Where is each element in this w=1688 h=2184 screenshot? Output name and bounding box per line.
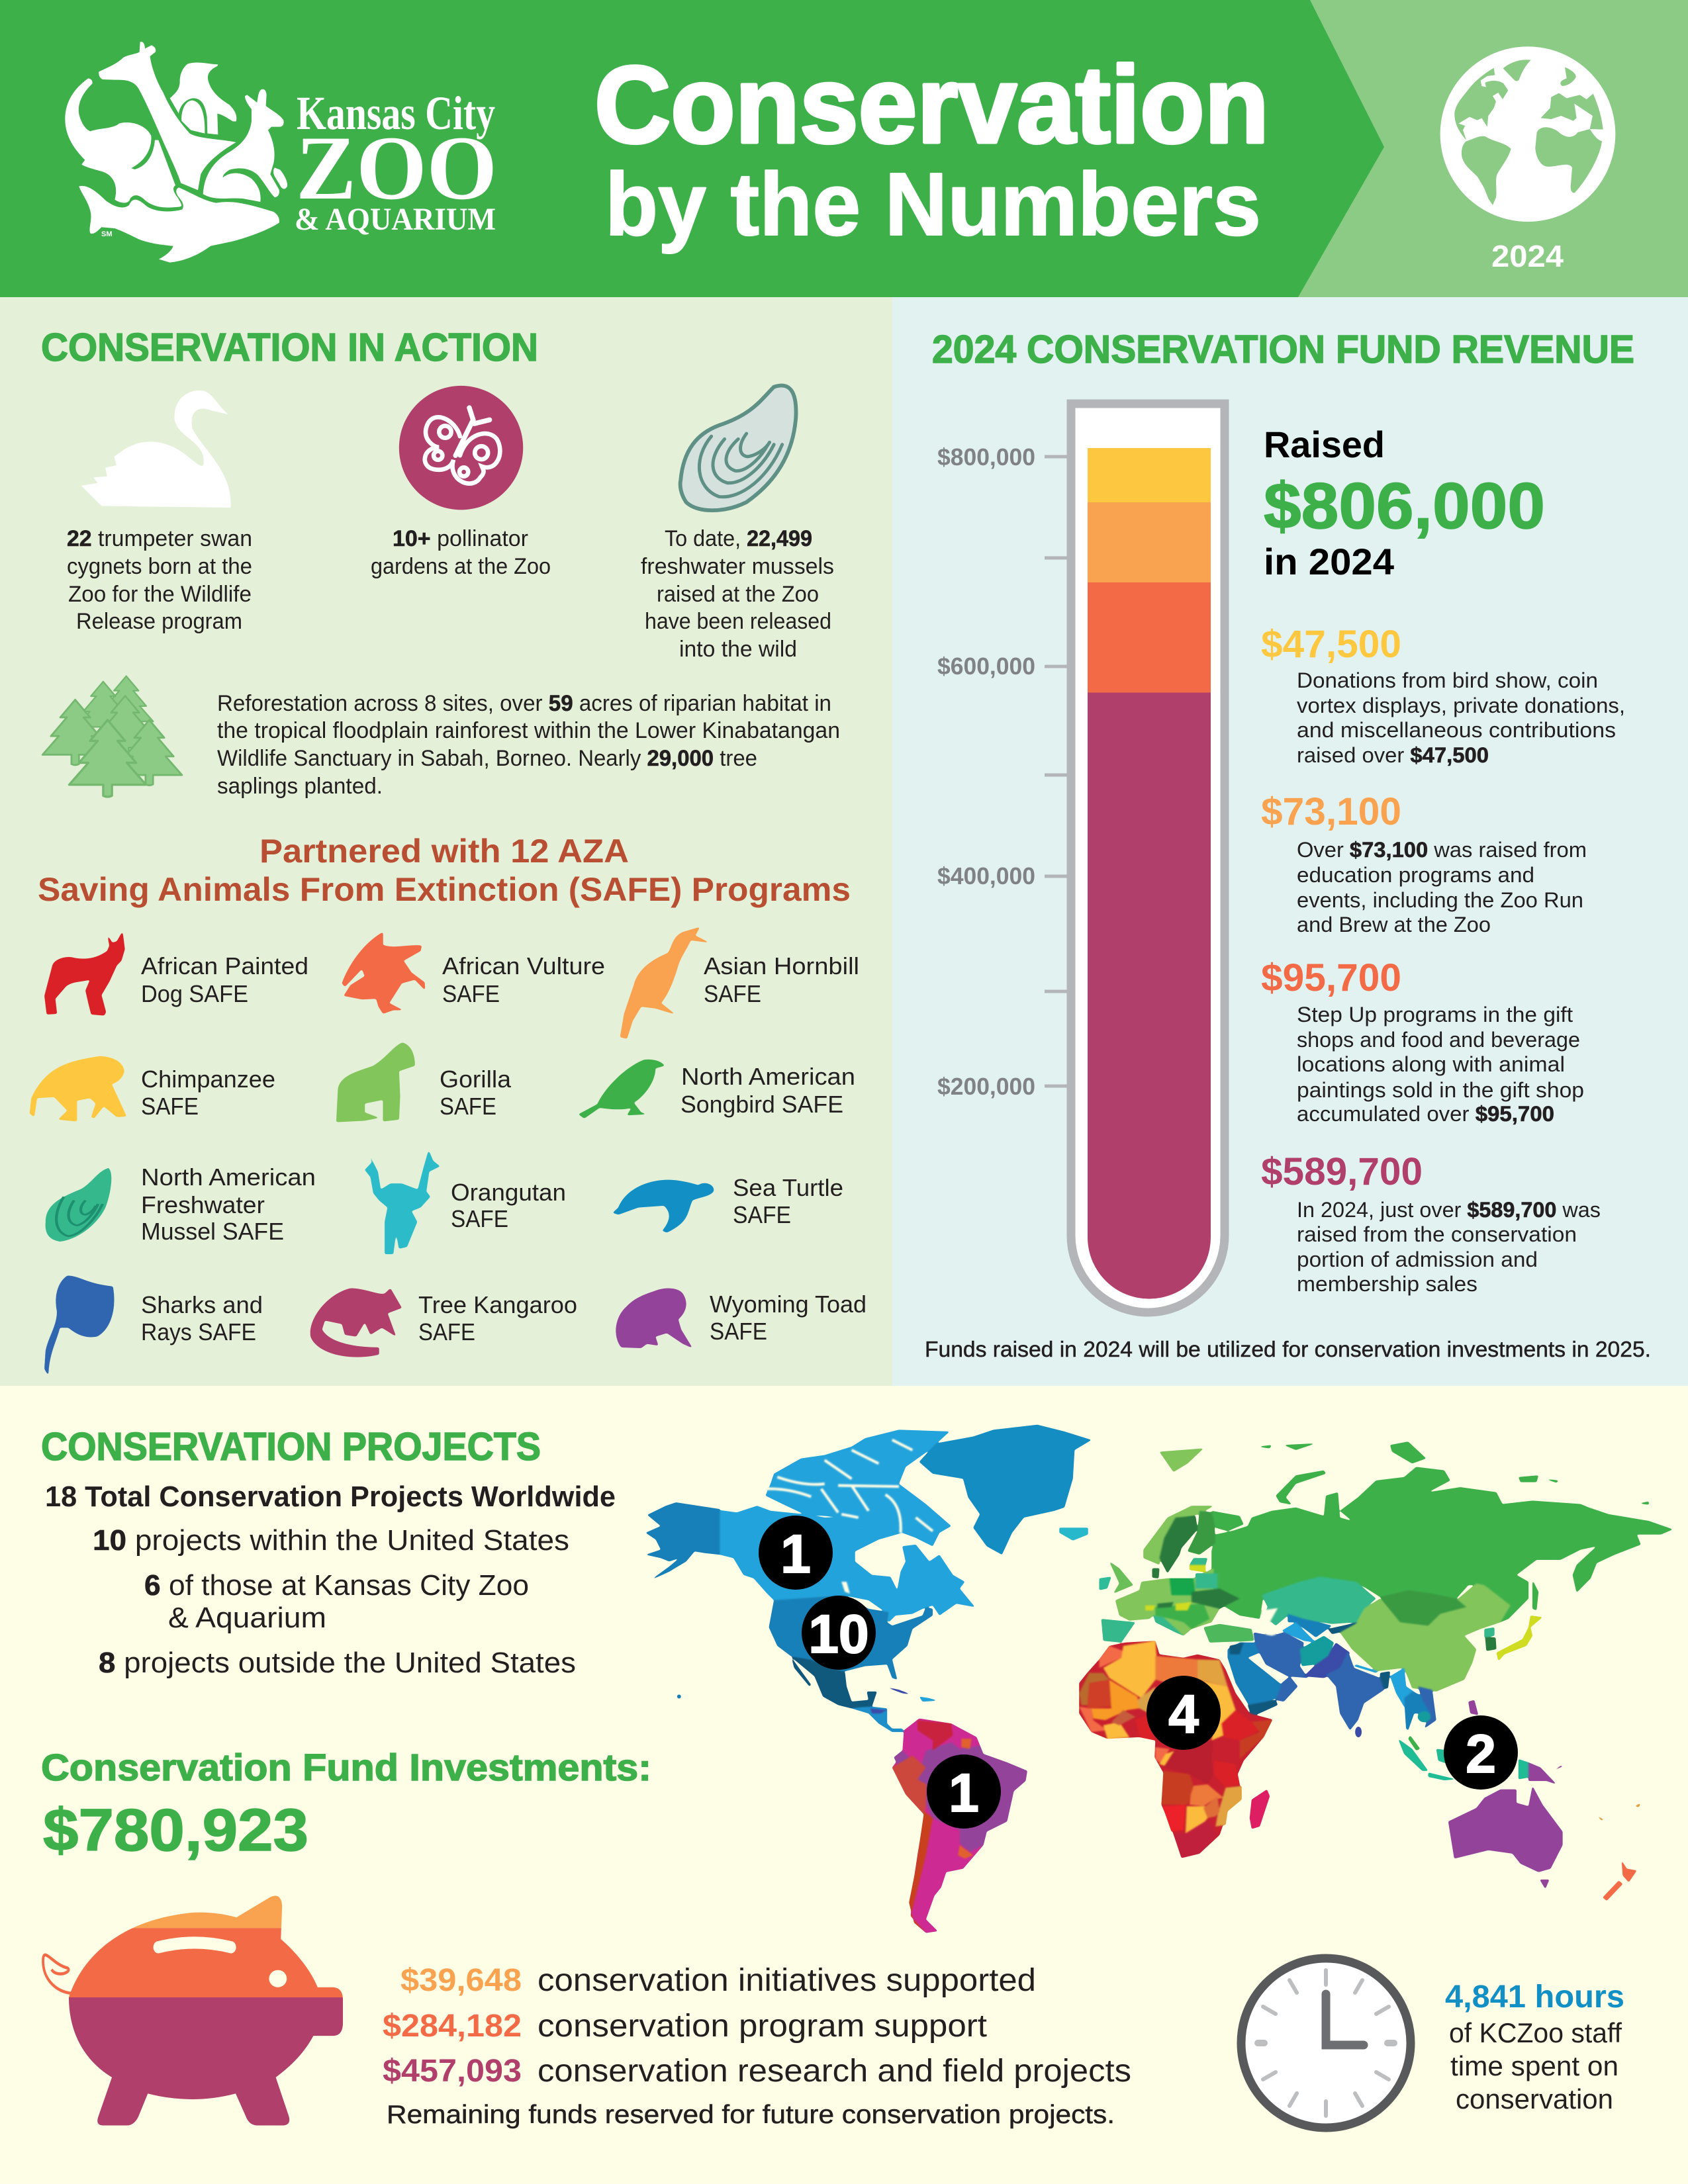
project counts: 8 projects outside the United States — [99, 1647, 576, 1679]
icon: globe — [1440, 46, 1615, 222]
project counts: 6 of those at Kansas City Zoo — [144, 1569, 529, 1602]
item: 95,700: paintings sold in the gift shop — [1297, 1078, 1584, 1102]
heading: fund investments — [41, 1747, 651, 1864]
icon: clock — [1241, 1958, 1411, 2128]
item: 47,500 — [1261, 623, 1625, 767]
label: Tree Kangaroo — [418, 1291, 577, 1345]
marker: South America 1 — [927, 1754, 1001, 1829]
label: Asian Hornbill — [704, 952, 859, 1007]
investment breakdown: Remaining funds reserved for future conservation projects. — [387, 2101, 1115, 2129]
item: 589,700: $589,700 — [1261, 1150, 1423, 1193]
icon: vulture — [342, 932, 425, 1014]
text: swan cygnets: 22 trumpeter swan — [67, 526, 252, 551]
item: 47,500: vortex displays, private donations, — [1297, 694, 1625, 717]
text: reforestation: the tropical floodplain rainforest within the Lower Kinabatangan — [217, 718, 840, 743]
text: pollinator gardens: 10+ pollinator — [393, 526, 528, 551]
label: African Painted Dog: African Painted — [141, 952, 308, 979]
heading: SAFE programs: Saving Animals From Extinction (SAFE) Programs — [38, 871, 851, 908]
panel: conservation in action — [0, 297, 892, 1386]
header banner — [0, 0, 1688, 297]
marker: United States 10: 10 — [808, 1604, 869, 1664]
label: Gorilla: Gorilla — [440, 1066, 512, 1093]
label: Sharks and Rays: Sharks and — [141, 1291, 263, 1318]
heading: fund investments: Conservation Fund Investments: — [41, 1747, 651, 1789]
label: African Painted Dog: Dog SAFE — [141, 980, 248, 1007]
label: North American Freshwater Mussel: Mussel SAFE — [141, 1218, 284, 1245]
axis ticks and labels: $800,000 — [937, 443, 1035, 471]
icon: mussel — [680, 385, 796, 510]
icon: pine trees — [42, 676, 182, 797]
investment breakdown: conservation program support — [538, 2009, 987, 2044]
title: Conservation — [594, 44, 1269, 165]
label: Sea Turtle: Sea Turtle — [733, 1174, 843, 1201]
icon: chimpanzee — [30, 1056, 126, 1121]
item: 95,700: accumulated over $95,700 — [1297, 1102, 1554, 1126]
text: swan cygnets: Release program — [76, 609, 242, 634]
logo wordmark: ZOO — [296, 117, 497, 218]
panel: conservation projects — [41, 1425, 1673, 2129]
project counts: 10 projects within the United States — [93, 1524, 569, 1557]
label: Orangutan: SAFE — [451, 1205, 508, 1232]
label: Gorilla: SAFE — [440, 1093, 496, 1120]
label: North American Songbird: Songbird SAFE — [680, 1091, 843, 1118]
label: Sea Turtle — [733, 1174, 843, 1228]
icon: butterfly in circle — [399, 386, 523, 510]
staff time callout: conservation — [1456, 2083, 1613, 2115]
logo wordmark — [295, 87, 497, 237]
axis ticks and labels: $600,000 — [937, 653, 1035, 680]
label: Tree Kangaroo: Tree Kangaroo — [418, 1291, 577, 1318]
icon: ray — [44, 1276, 114, 1376]
item: 47,500: and miscellaneous contributions — [1297, 718, 1616, 742]
investment breakdown: $39,648 — [400, 1963, 522, 1998]
label: Sharks and Rays — [141, 1291, 263, 1345]
axis ticks and labels: $200,000 — [937, 1073, 1035, 1100]
text: freshwater mussels: To date, 22,499 — [665, 526, 812, 551]
icon: tree kangaroo — [310, 1288, 402, 1357]
callout: raised total: Raised — [1264, 424, 1385, 465]
SAFE icons grid — [30, 927, 867, 1376]
label: North American Songbird: North American — [681, 1063, 855, 1090]
marker: Africa 4: 4 — [1168, 1684, 1199, 1745]
label: Chimpanzee: SAFE — [141, 1093, 199, 1120]
item: 73,100: $73,100 — [1261, 790, 1401, 833]
heading: SAFE programs: Partnered with 12 AZA — [259, 833, 629, 870]
text: reforestation — [217, 691, 840, 799]
text: reforestation: saplings planted. — [217, 774, 383, 799]
label: African Vulture: African Vulture — [442, 952, 605, 979]
footnote: Funds raised in 2024 will be utilized for conservation investments in 2025. — [925, 1337, 1651, 1361]
europe asia africa oceania — [1079, 1441, 1673, 1901]
text: pollinator gardens — [371, 526, 551, 579]
text: freshwater mussels: raised at the Zoo — [657, 582, 819, 607]
item: 95,700: locations along with animal — [1297, 1052, 1565, 1076]
item: 589,700: raised from the conservation — [1297, 1222, 1577, 1246]
label: Chimpanzee: Chimpanzee — [141, 1066, 275, 1093]
staff time callout — [1445, 1979, 1624, 2115]
label: African Vulture — [442, 952, 605, 1007]
label: African Vulture: SAFE — [442, 980, 500, 1007]
label: North American Freshwater Mussel: Freshwater — [141, 1191, 265, 1218]
label: Sharks and Rays: Rays SAFE — [141, 1318, 256, 1345]
text: pollinator gardens: gardens at the Zoo — [371, 554, 551, 579]
project counts: 18 Total Conservation Projects Worldwide — [45, 1480, 616, 1513]
marker: Southeast Asia 2 — [1444, 1715, 1518, 1790]
icon: gorilla — [336, 1042, 415, 1122]
label: Asian Hornbill: Asian Hornbill — [704, 952, 859, 979]
label: Orangutan: Orangutan — [451, 1179, 566, 1206]
item: 589,700: portion of admission and — [1297, 1248, 1538, 1271]
callout: raised total: in 2024 — [1264, 541, 1394, 582]
marker: Africa 4 — [1147, 1676, 1221, 1750]
title: by the Numbers — [605, 154, 1261, 254]
heading: CONSERVATION PROJECTS — [41, 1425, 541, 1469]
label: Chimpanzee — [141, 1066, 275, 1120]
investment breakdown: $284,182 — [383, 2009, 522, 2044]
item: 47,500: Donations from bird show, coin — [1297, 668, 1598, 692]
thermometer tube — [1071, 404, 1225, 1312]
segment: 47,500 — [1088, 448, 1211, 502]
icon: hornbill — [620, 927, 710, 1039]
icon: swan — [81, 390, 231, 508]
label: Tree Kangaroo: SAFE — [418, 1318, 475, 1345]
label: Sea Turtle: SAFE — [733, 1201, 791, 1228]
label: Wyoming Toad: SAFE — [710, 1318, 767, 1345]
item: 73,100: and Brew at the Zoo — [1297, 913, 1491, 936]
label: Wyoming Toad: Wyoming Toad — [710, 1291, 867, 1318]
label: North American Freshwater Mussel — [141, 1163, 316, 1245]
marker: South America 1: 1 — [949, 1763, 979, 1823]
label: North American Songbird — [680, 1063, 855, 1118]
callout: raised total: $806,000 — [1264, 469, 1545, 542]
item: 47,500: $47,500 — [1261, 623, 1401, 666]
text: reforestation: Wildlife Sanctuary in Sabah, Borneo. Nearly 29,000 tree — [217, 746, 757, 771]
item: 95,700: Step Up programs in the gift — [1297, 1003, 1573, 1026]
heading: fund investments: $780,923 — [43, 1797, 308, 1864]
icon: painted dog — [44, 931, 125, 1016]
label: Gorilla — [440, 1066, 512, 1120]
project counts — [45, 1480, 616, 1679]
staff time callout: time spent on — [1450, 2050, 1618, 2081]
segment: 589,700 — [1088, 692, 1211, 1298]
investment breakdown: conservation research and field projects — [538, 2054, 1131, 2089]
text: swan cygnets: Zoo for the Wildlife — [68, 582, 252, 607]
item: 589,700: In 2024, just over $589,700 was — [1297, 1198, 1601, 1222]
staff time callout: of KCZoo staff — [1449, 2017, 1622, 2048]
label: Asian Hornbill: SAFE — [704, 980, 761, 1007]
logo wordmark: & AQUARIUM — [295, 202, 496, 237]
text: freshwater mussels: into the wild — [679, 637, 797, 662]
icon: orangutan — [365, 1148, 440, 1254]
project counts: & Aquarium — [168, 1602, 326, 1634]
text: freshwater mussels — [641, 526, 834, 662]
americas — [645, 1425, 1092, 1933]
icon: green mussel — [46, 1168, 111, 1242]
icon: sea turtle — [613, 1180, 714, 1232]
item: 95,700 — [1261, 956, 1584, 1126]
text: reforestation: Reforestation across 8 sites, over 59 acres of riparian habitat in — [217, 691, 831, 716]
icon: toad — [616, 1289, 692, 1348]
segment: 95,700 — [1088, 582, 1211, 692]
text: freshwater mussels: have been released — [645, 609, 831, 634]
investment breakdown: conservation initiatives supported — [538, 1963, 1036, 1998]
investment breakdown: $457,093 — [383, 2054, 522, 2089]
label: North American Freshwater Mussel: North American — [141, 1163, 316, 1191]
logo service mark: SM — [101, 230, 113, 238]
title — [594, 44, 1269, 254]
item: 95,700: shops and food and beverage — [1297, 1028, 1580, 1052]
marker: Canada 1: 1 — [780, 1524, 811, 1584]
axis ticks and labels: $400,000 — [937, 862, 1035, 889]
item: 47,500: raised over $47,500 — [1297, 743, 1489, 767]
logo wordmark: Kansas City — [297, 87, 495, 140]
text: freshwater mussels: freshwater mussels — [641, 554, 834, 579]
icon: piggy bank — [43, 1891, 351, 2129]
marker: Southeast Asia 2: 2 — [1466, 1724, 1496, 1784]
world map — [645, 1425, 1673, 1933]
panel: conservation fund revenue — [892, 297, 1688, 1386]
callout: raised total — [1264, 424, 1545, 582]
segment: 73,100 — [1088, 502, 1211, 582]
icon: songbird — [579, 1060, 665, 1118]
label: Wyoming Toad — [710, 1291, 867, 1345]
text: swan cygnets: cygnets born at the — [67, 554, 252, 579]
item: 73,100 — [1261, 790, 1587, 936]
item: 589,700: membership sales — [1297, 1272, 1477, 1296]
item: 73,100: Over $73,100 was raised from — [1297, 838, 1587, 862]
item: 95,700: $95,700 — [1261, 956, 1401, 999]
marker: United States 10 — [802, 1596, 876, 1670]
item: 73,100: education programs and — [1297, 863, 1534, 887]
logo: Kansas City Zoo & Aquarium — [65, 42, 497, 263]
text: swan cygnets — [67, 526, 252, 634]
heading: SAFE programs — [38, 833, 851, 908]
axis ticks and labels — [937, 443, 1067, 1100]
heading: 2024 CONSERVATION FUND REVENUE — [932, 328, 1634, 371]
item: 73,100: events, including the Zoo Run — [1297, 888, 1583, 912]
label: African Painted Dog — [141, 952, 308, 1007]
logo animal silhouettes — [65, 42, 287, 263]
item: 589,700 — [1261, 1150, 1601, 1296]
heading: CONSERVATION IN ACTION — [41, 326, 538, 369]
label: Orangutan — [451, 1179, 566, 1232]
staff time callout: 4,841 hours — [1445, 1979, 1624, 2015]
thermometer chart — [937, 404, 1225, 1312]
year label: 2024 — [1491, 239, 1564, 273]
marker: Canada 1 — [759, 1516, 833, 1590]
investment breakdown — [383, 1963, 1131, 2129]
